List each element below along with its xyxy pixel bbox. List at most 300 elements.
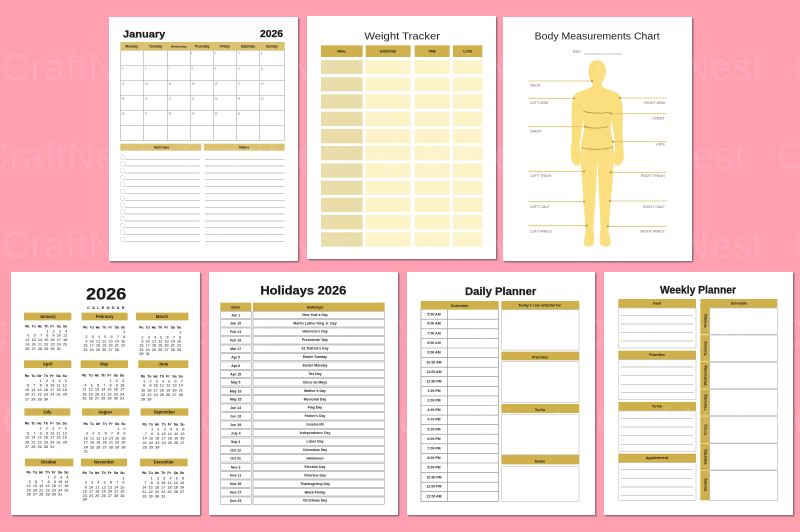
self-care checklist: Self-care <box>154 145 169 149</box>
section: Priorities: Priorities <box>649 353 665 357</box>
holidays table rows: Apr 5 <box>231 355 240 359</box>
calendar grid: 15 <box>192 83 195 85</box>
holidays table rows: May 5 <box>231 381 241 385</box>
calendar grid: 6 <box>145 68 147 70</box>
calendar grid <box>120 51 285 141</box>
heading: Body Measurements Chart: Body Measurements Chart <box>535 31 660 42</box>
month: September: 14 15 16 17 18 19 20 <box>142 437 185 441</box>
month: August: 1 2 <box>83 428 126 432</box>
notes lines <box>204 144 285 241</box>
weekday header band: Thursday <box>195 44 210 48</box>
schedule column: 12:00 PM <box>426 379 442 383</box>
left measurement labels: WAIST <box>530 130 543 134</box>
weekday header band: Sunday <box>266 44 278 48</box>
holidays table rows: Tax Day <box>308 372 322 376</box>
month: July: 27 28 29 30 31 <box>25 446 55 450</box>
watermark: CraftNest repeated: CraftNest <box>398 47 566 89</box>
month: November: 9 10 11 12 13 14 15 <box>82 486 125 490</box>
holidays table rows: Columbus Day <box>303 448 327 452</box>
calendar grid: 18 <box>261 83 264 85</box>
section: To-Do: To-Do <box>535 408 546 412</box>
holidays table rows: Feb 16 <box>230 339 241 343</box>
schedule column: 1:00 PM <box>427 389 441 393</box>
holidays table rows: Oct 12 <box>230 448 241 452</box>
holidays table rows: Christmas Day <box>303 499 327 503</box>
month: March: 2 3 4 5 6 7 8 <box>139 336 182 340</box>
month: May: 25 26 27 28 29 30 31 <box>82 398 125 402</box>
section: Appointment <box>618 454 696 500</box>
exercise, time and loss cells <box>366 60 482 247</box>
watermark: CraftNest repeated: CraftNest <box>2 401 170 443</box>
watermark: CraftNest repeated: CraftNest <box>379 313 547 355</box>
heading: January 2026 <box>123 29 284 40</box>
weekday header band: Saturday <box>241 44 255 48</box>
holidays table rows: Juneteenth <box>306 423 324 427</box>
month: July: 6 7 8 9 10 11 12 <box>25 432 68 436</box>
month: December: December <box>154 460 174 465</box>
holidays table rows: Nov 26 <box>230 482 241 486</box>
schedule column <box>421 301 499 501</box>
weekday header band: Tuesday <box>149 44 162 48</box>
month: August <box>82 408 129 455</box>
holidays table rows: May 10 <box>230 389 242 393</box>
section: weekly schedule: Tuesday <box>704 340 708 356</box>
month: March: Mo Tu We Th Fr Sa Su <box>139 326 182 331</box>
notes lines: Notes <box>239 145 249 149</box>
holidays table rows: Father's Day <box>305 414 325 418</box>
section: To-Do: To-Do <box>652 404 663 408</box>
watermark: CraftNest repeated: CraftNest <box>596 401 764 443</box>
heading: Weight Tracker: Weight Tracker <box>364 31 441 42</box>
section: weekly schedule: Thursday <box>704 393 708 411</box>
calendar grid: 7 <box>169 68 171 70</box>
calendar grid: 20 <box>145 98 148 100</box>
month: June: 8 9 10 11 12 13 14 <box>141 385 184 389</box>
calendar grid: 14 <box>169 83 172 85</box>
weekday header band: Friday <box>220 44 230 48</box>
month: January: 19 20 21 22 23 24 25 <box>25 343 68 347</box>
calendar grid: 16 <box>215 83 218 85</box>
month: February: 9 10 11 12 13 14 15 <box>83 340 126 344</box>
month: December: Mo Tu We Th Fr Sa Su <box>142 471 185 476</box>
panel: Holidays 2026 page <box>209 272 398 515</box>
month: November <box>81 459 127 503</box>
month: February: Mo Tu We Th Fr Sa Su <box>83 326 126 331</box>
calendar grid: 4 <box>261 53 263 55</box>
month: November: 16 17 18 19 20 21 22 <box>82 491 125 495</box>
holidays table rows: Jan 19 <box>230 322 241 326</box>
month: January: 12 13 14 15 16 17 18 <box>25 339 68 343</box>
calendar grid: 3 <box>238 53 240 55</box>
panel: Weekly Planner page <box>604 272 793 515</box>
month: October: Mo Tu We Th Fr Sa Su <box>26 470 69 475</box>
month: August: Mo Tu We Th Fr Sa Su <box>83 422 126 427</box>
weekday header band: Monday <box>125 44 138 48</box>
holidays table rows: Labor Day <box>306 440 324 444</box>
month: October: 5 6 7 8 9 10 11 <box>26 481 69 485</box>
month: January: Mo Tu We Th Fr Sa Su <box>25 324 68 329</box>
holidays table rows: May 25 <box>230 398 242 402</box>
schedule column: 11:00 PM <box>427 485 442 489</box>
tracker table header: LOSS <box>463 49 472 53</box>
month: May: 11 12 13 14 15 16 17 <box>82 389 125 393</box>
watermark: CraftNest repeated: CraftNest <box>596 225 764 267</box>
month: May: 1 2 3 <box>82 380 125 384</box>
month: December <box>140 459 188 500</box>
watermark: CraftNest repeated: CraftNest <box>596 47 764 89</box>
watermark: CraftNest repeated: CraftNest <box>578 313 746 355</box>
month: July: 13 14 15 16 17 18 19 <box>25 437 68 441</box>
month: March <box>136 313 188 357</box>
right measurement labels: RIGHT ANKLE <box>641 229 665 233</box>
watermark: CraftNest repeated: CraftNest <box>398 401 566 443</box>
month: June <box>138 360 188 403</box>
date field <box>573 50 622 54</box>
right measurement labels: RIGHT THIGH <box>641 174 665 178</box>
watermark: CraftNest repeated: CraftNest <box>2 225 170 267</box>
calendar grid: 28 <box>169 114 172 116</box>
section: Goal <box>618 299 696 348</box>
month: October: 12 13 14 15 16 17 18 <box>26 485 69 489</box>
month: May: Mo Tu We Th Fr Sa Su <box>82 374 125 379</box>
month: March: 16 17 18 19 20 21 22 <box>139 345 182 349</box>
holidays table rows: Mar 17 <box>230 347 241 351</box>
month: September: 21 22 23 24 25 26 27 <box>142 442 185 446</box>
holidays table rows: St. Patrick's Day <box>301 347 329 351</box>
panel: January monthly calendar page <box>109 17 298 261</box>
calendar grid: 24 <box>238 98 241 100</box>
tracker table header: MEAL <box>337 49 346 53</box>
month: September: September <box>154 410 175 415</box>
month: December: 7 8 9 10 11 12 13 <box>142 482 185 486</box>
holidays table header: Holidays <box>307 304 324 309</box>
holidays table rows: Cinco de Mayo <box>303 380 327 384</box>
holidays table rows: Apr 6 <box>231 364 240 368</box>
weekday header band <box>120 42 285 51</box>
left measurement labels: LEFT CALF <box>530 205 550 209</box>
section: Today's I am Grateful for <box>501 301 579 350</box>
calendar grid: 30 <box>215 114 218 116</box>
tracker table header: TIME <box>428 49 436 53</box>
icon: human body figure <box>571 61 623 246</box>
month: June: 15 16 17 18 19 20 21 <box>141 389 184 393</box>
calendar grid: 8 <box>192 68 194 70</box>
watermark: CraftNest repeated: CraftNest <box>379 136 547 178</box>
holidays table rows: Jun 18 <box>230 415 241 419</box>
heading: Daily Planner: Daily Planner <box>465 286 537 298</box>
calendar grid: 1 <box>191 53 193 55</box>
holidays table rows: Valentine's Day <box>302 330 328 334</box>
calendar grid: 10 <box>238 68 241 70</box>
month: April: 1 2 3 4 5 <box>25 380 68 384</box>
holidays table rows: Martin Luther King Jr. Day <box>293 321 337 325</box>
calendar grid: 26 <box>122 114 125 116</box>
left measurement labels <box>528 80 593 233</box>
section: Goal: Goal <box>653 301 661 305</box>
schedule column: 9:00 AM <box>427 351 441 355</box>
section: Today's I am Grateful for: Today's I am Grateful for <box>518 304 562 308</box>
schedule column: 11:00 AM <box>427 370 442 374</box>
schedule column: 12:00 AM <box>426 494 442 498</box>
calendar grid: 2 <box>215 53 217 55</box>
schedule column: 2:00 PM <box>427 399 441 403</box>
schedule column: 6:00 PM <box>427 437 441 441</box>
holidays table rows: Thanksgiving Day <box>300 482 330 486</box>
watermark: CraftNest repeated: CraftNest <box>578 136 746 178</box>
section: weekly schedule: Wednesday <box>704 364 708 385</box>
month: June: June <box>158 362 169 367</box>
heading: 2026 Calendar: 2026 <box>86 285 126 304</box>
month: November: November <box>94 460 115 465</box>
month: November: 23 24 25 26 27 28 29 <box>82 495 125 499</box>
watermark: CraftNest repeated: CraftNest <box>398 225 566 267</box>
month: September: Mo Tu We Th Fr Sa Su <box>142 422 185 427</box>
holidays table rows: Presidents' Day <box>302 338 328 342</box>
holidays table rows: Jun 19 <box>230 423 241 427</box>
holidays table header <box>220 303 385 311</box>
right measurement labels: RIGHT ARM <box>644 101 665 105</box>
holidays table rows: Veterans Day <box>304 473 326 477</box>
month: September <box>141 408 188 451</box>
schedule column: Schedule <box>451 303 469 308</box>
month: August: 10 11 12 13 14 15 16 <box>83 437 126 441</box>
right measurement labels: HIPS <box>656 143 665 147</box>
panel: Weight Tracker page <box>307 16 496 259</box>
holidays table rows: Dec 25 <box>230 499 241 503</box>
section: weekly schedule <box>700 299 777 500</box>
month: September: 1 2 3 4 5 6 <box>142 428 185 432</box>
month: March: 1 <box>139 332 182 336</box>
calendar grid: 19 <box>122 98 125 100</box>
calendar grid: 21 <box>169 98 172 100</box>
holidays table rows <box>221 311 384 504</box>
month: August: 3 4 5 6 7 8 9 <box>83 433 126 437</box>
holidays table rows: Jun 14 <box>230 406 241 410</box>
calendar grid: 23 <box>215 98 218 100</box>
month: December: 21 22 23 24 25 26 27 <box>142 491 185 495</box>
month: April <box>24 360 71 402</box>
schedule column: 5:00 AM <box>427 312 441 316</box>
section: Priorities <box>501 352 579 402</box>
holidays table rows: July 4 <box>231 431 241 435</box>
month: January: 26 27 28 29 30 31 <box>25 348 62 352</box>
month: October: 1 2 3 4 <box>26 476 69 480</box>
watermark: CraftNest repeated: CraftNest <box>200 47 368 89</box>
month: July: July <box>43 409 52 414</box>
calendar grid: 17 <box>238 83 241 85</box>
month: November: 30 <box>82 499 88 503</box>
holidays table rows: Independence Day <box>300 431 330 435</box>
month: July: 1 2 3 4 5 <box>25 428 68 432</box>
month: August: August <box>98 410 113 415</box>
month: April: Mo Tu We Th Fr Sa Su <box>25 374 68 379</box>
section: weekly schedule: Friday <box>704 423 708 435</box>
month: April: April <box>43 362 52 367</box>
month: November: Mo Tu We Th Fr Sa Su <box>82 471 125 476</box>
heading: January 2026: January <box>123 29 166 40</box>
month: November: 1 <box>82 477 125 481</box>
month: May <box>81 360 128 402</box>
holidays table rows: Apr 15 <box>230 372 241 376</box>
calendar grid: 29 <box>192 114 195 116</box>
month: July <box>24 408 70 450</box>
date field: Date: <box>573 50 581 54</box>
schedule column: 4:00 PM <box>427 418 441 422</box>
section: To-Do <box>618 402 696 451</box>
heading: Weekly Planner: Weekly Planner <box>660 285 737 297</box>
month: December: 14 15 16 17 18 19 20 <box>142 486 185 490</box>
section: Priorities: Priorities <box>532 356 548 360</box>
month: August: 17 18 19 20 21 22 23 <box>83 442 126 446</box>
section: weekly schedule: Saturday <box>704 448 708 464</box>
month: May: May <box>100 362 109 367</box>
month: March: 30 31 <box>139 353 151 357</box>
section: Priorities <box>618 351 696 400</box>
holidays table rows: New Year's Day <box>302 313 328 317</box>
calendar grid: 11 <box>261 68 264 70</box>
month: November: 2 3 4 5 6 7 8 <box>82 482 125 486</box>
schedule column: 9:00 PM <box>427 466 441 470</box>
month: January: January <box>40 314 56 319</box>
holidays table rows: Halloween <box>306 457 324 461</box>
section: weekly schedule: Schedule <box>731 301 747 305</box>
holidays table rows: Memorial Day <box>304 397 326 401</box>
month: May: 4 5 6 7 8 9 10 <box>82 384 125 388</box>
schedule column: 6:00 AM <box>427 322 441 326</box>
month: February: February <box>96 314 114 319</box>
holidays table rows: Easter Monday <box>303 363 327 367</box>
month: March: 9 10 11 12 13 14 15 <box>139 341 182 345</box>
holidays table rows: Nov 11 <box>230 474 241 478</box>
holidays table rows: Nov 27 <box>230 491 241 495</box>
watermark: CraftNest repeated <box>0 47 800 443</box>
month: February: 2 3 4 5 6 7 8 <box>83 336 126 340</box>
heading: 2026 Calendar: CALENDAR <box>87 305 125 310</box>
month: May: 18 19 20 21 22 23 24 <box>82 393 125 397</box>
heading: January 2026: 2026 <box>260 29 284 40</box>
calendar grid: 5 <box>122 68 124 70</box>
schedule column: 8:00 AM <box>427 341 441 345</box>
tracker table header: EXERCISE <box>380 49 396 53</box>
tracker table header <box>321 45 482 57</box>
right measurement labels <box>607 97 666 233</box>
holidays table rows: Sep 4 <box>231 440 240 444</box>
weekday header band: Wednesday <box>171 44 187 48</box>
month: October: 19 20 21 22 23 24 25 <box>26 489 69 493</box>
month: July: 20 21 22 23 24 25 26 <box>25 441 68 445</box>
watermark: CraftNest repeated: CraftNest <box>2 47 170 89</box>
schedule column: 8:00 PM <box>427 456 441 460</box>
month: June: 29 30 <box>141 399 152 403</box>
month: June: Mo Tu We Th Fr Sa Su <box>141 375 184 380</box>
month: October <box>25 459 73 498</box>
calendar grid: 27 <box>145 114 148 116</box>
month: January: 1 2 3 4 <box>25 331 68 335</box>
month: February: 23 24 25 26 27 28 <box>83 349 120 353</box>
calendar grid: 22 <box>192 98 195 100</box>
calendar grid: 9 <box>215 68 217 70</box>
holidays table rows: Easter Sunday <box>303 355 327 359</box>
left measurement labels: NECK <box>530 84 541 88</box>
calendar grid: 12 <box>122 83 125 85</box>
month: December: 1 2 3 4 5 6 <box>142 477 185 481</box>
schedule column: 10:00 PM <box>426 475 442 479</box>
left measurement labels: LEFT ANKLE <box>530 229 553 233</box>
section: Notes: Notes <box>535 460 545 464</box>
panel: 2026 yearly calendar page <box>11 272 200 515</box>
meal column cells <box>321 60 363 247</box>
schedule column: 5:00 PM <box>427 427 441 431</box>
holidays table rows: Nov 3 <box>231 465 240 469</box>
month: January: 5 6 7 8 9 10 11 <box>25 335 68 339</box>
holidays table rows: Flag Day <box>308 406 322 410</box>
month: March: 23 24 25 26 27 28 29 <box>139 349 182 353</box>
month: September: 28 29 30 <box>142 447 160 451</box>
month: January <box>24 313 71 352</box>
month: March: March <box>156 314 169 319</box>
month: September: 7 8 9 10 11 12 13 <box>142 433 185 437</box>
holidays table rows: Oct 31 <box>230 457 241 461</box>
watermark: CraftNest repeated: CraftNest <box>200 225 368 267</box>
schedule column: 10:00 AM <box>426 361 442 365</box>
section: weekly schedule: Monday <box>704 313 708 328</box>
panel: Body Measurements Chart page <box>503 17 692 261</box>
right measurement labels: CHEST <box>652 116 665 120</box>
month: August: 31 <box>83 451 89 455</box>
month: July: Mo Tu We Th Fr Sa Su <box>25 422 68 427</box>
self-care checklist <box>120 144 201 242</box>
left measurement labels: LEFT ARM <box>530 101 548 105</box>
month: June: 1 2 3 4 5 6 7 <box>141 380 184 384</box>
calendar grid: 31 <box>238 114 241 116</box>
month: December: 28 29 30 31 <box>142 496 166 500</box>
month: April: 20 21 22 23 24 25 26 <box>25 394 68 398</box>
watermark: CraftNest repeated: CraftNest <box>180 136 348 178</box>
month: April: 6 7 8 9 10 11 12 <box>25 385 68 389</box>
month: February: 1 <box>83 331 126 335</box>
schedule column: 7:00 AM <box>427 331 441 335</box>
calendar grid: 25 <box>261 98 264 100</box>
month: April: 27 28 29 30 <box>25 398 49 402</box>
month: August: 24 25 26 27 28 29 30 <box>83 446 126 450</box>
holidays table rows: Feb 14 <box>230 330 241 334</box>
heading: Holidays 2026: Holidays 2026 <box>260 284 347 298</box>
holidays table header: Date <box>231 304 241 309</box>
month: February <box>82 313 128 353</box>
holidays table rows: Mother's Day <box>304 389 326 393</box>
holidays table rows: Jan 1 <box>231 313 240 317</box>
watermark: CraftNest repeated: CraftNest <box>200 401 368 443</box>
holidays table rows: Black Friday <box>305 490 325 494</box>
left measurement labels: LEFT THIGH <box>530 174 552 178</box>
section: weekly schedule: Sunday <box>704 477 708 491</box>
calendar grid: 13 <box>145 83 148 85</box>
section: Notes <box>501 455 579 501</box>
right measurement labels: RIGHT CALF <box>643 205 665 209</box>
section: Appointment: Appointment <box>646 456 669 460</box>
section: To-Do <box>501 404 579 454</box>
panel: Daily Planner page <box>407 272 595 515</box>
holidays table rows: Election Day <box>305 465 326 469</box>
month: February: 16 17 18 19 20 21 22 <box>83 345 126 349</box>
month: April: 13 14 15 16 17 18 19 <box>25 389 68 393</box>
month: October: 26 27 28 29 30 31 <box>26 494 63 498</box>
month: October: October <box>41 460 57 465</box>
watermark: CraftNest repeated: CraftNest <box>180 313 348 355</box>
month: June: 22 23 24 25 26 27 28 <box>141 394 184 398</box>
schedule column: 7:00 PM <box>427 446 441 450</box>
heading: 2026 Calendar <box>86 285 126 310</box>
